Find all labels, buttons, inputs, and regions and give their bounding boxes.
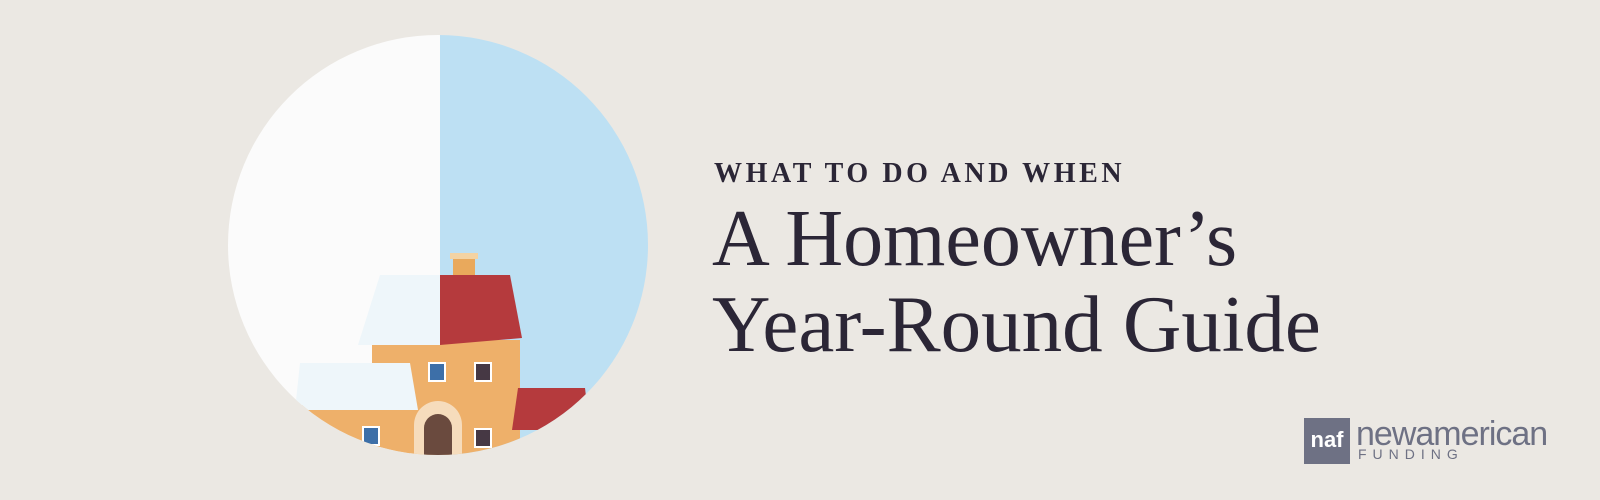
kicker: WHAT TO DO AND WHEN — [714, 158, 1125, 189]
logo: FUNDING — [1358, 446, 1464, 462]
house — [295, 253, 590, 470]
summer half — [440, 30, 660, 460]
title line 1: A Homeowner’s — [712, 195, 1237, 283]
title line 2: Year-Round Guide — [712, 279, 1321, 369]
winter half — [228, 35, 440, 400]
logo — [1304, 415, 1547, 464]
logo mark: naf — [1310, 427, 1344, 452]
logo wordmark: newamerican — [1356, 415, 1547, 453]
logo mark — [1304, 418, 1350, 464]
illustration: seasonal house circle — [228, 35, 648, 455]
